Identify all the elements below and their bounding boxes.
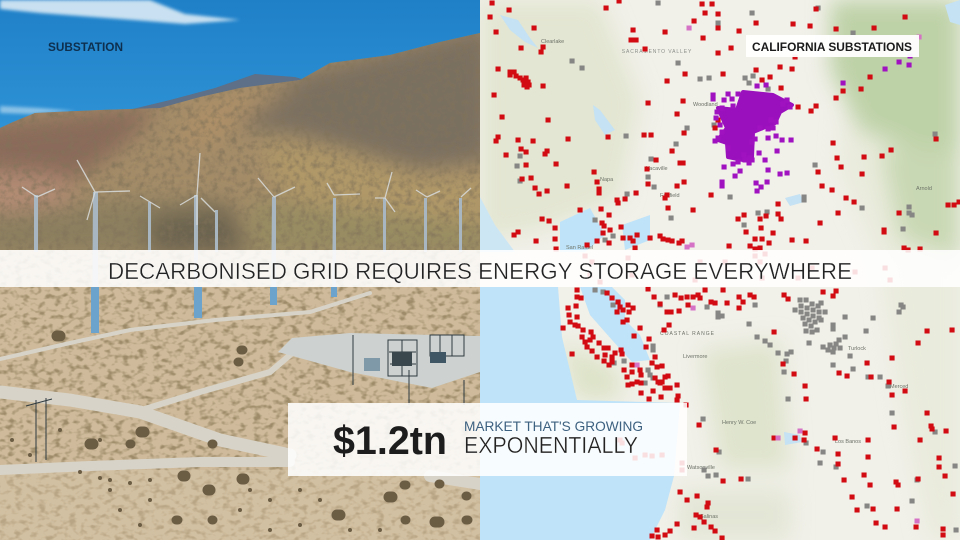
substations: pink	[637, 28, 919, 521]
substations: grey	[517, 3, 956, 530]
far mountain	[120, 74, 312, 115]
substations: purple cluster	[713, 56, 910, 191]
substation equipment	[26, 335, 464, 462]
map place labels: Woodland	[693, 102, 718, 108]
wind turbines	[22, 153, 471, 333]
big number: $1.2tn	[333, 419, 447, 463]
map place labels: Livermore	[683, 354, 707, 360]
map place labels: Clearlake	[541, 39, 564, 45]
label: California substations: CALIFORNIA SUBSTATIONS	[752, 40, 912, 54]
scrubland ground	[0, 250, 480, 540]
label: California substations	[746, 35, 919, 57]
access roads	[0, 293, 480, 484]
callout: market size	[288, 403, 687, 476]
sky	[0, 0, 480, 135]
exponentially: EXPONENTIALLY	[464, 432, 638, 458]
map place labels: COASTAL RANGE	[660, 331, 715, 337]
substation pad	[278, 333, 480, 388]
desert bushes	[12, 336, 468, 530]
map terrain shading	[480, 0, 960, 540]
photo: wind farm and substation	[0, 0, 490, 540]
foreground sand	[0, 470, 480, 540]
market subhead: MARKET THAT'S GROWING	[464, 418, 643, 434]
hillside	[0, 25, 490, 255]
map place labels	[541, 39, 932, 520]
map place labels: Henry W. Coe	[722, 420, 756, 426]
translucent headline band	[0, 250, 960, 287]
map place labels: San Rafael	[566, 245, 593, 251]
ocean	[480, 287, 680, 540]
lakes	[500, 0, 960, 445]
map place labels: Arnold	[916, 186, 932, 192]
map place labels: Los Banos	[835, 439, 861, 445]
map place labels: Salinas	[700, 514, 718, 520]
map place labels: Fairfield	[660, 193, 680, 199]
map place labels: Vacaville	[646, 166, 668, 172]
map place labels: Merced	[890, 384, 908, 390]
San Pablo and San Francisco Bay	[580, 287, 650, 362]
map place labels: Turlock	[848, 346, 866, 352]
map of Northern California	[480, 0, 960, 540]
headline: DECARBONISED GRID REQUIRES ENERGY STORAGE EVERYWHERE	[108, 258, 852, 284]
clouds	[0, 0, 240, 114]
substations: red	[490, 1, 959, 538]
map land base	[480, 0, 960, 540]
label: substation: SUBSTATION	[48, 40, 123, 54]
map place labels: Watsonville	[687, 465, 715, 471]
map place labels: SACRAMENTO VALLEY	[622, 49, 692, 55]
map place labels: Napa	[600, 177, 614, 183]
